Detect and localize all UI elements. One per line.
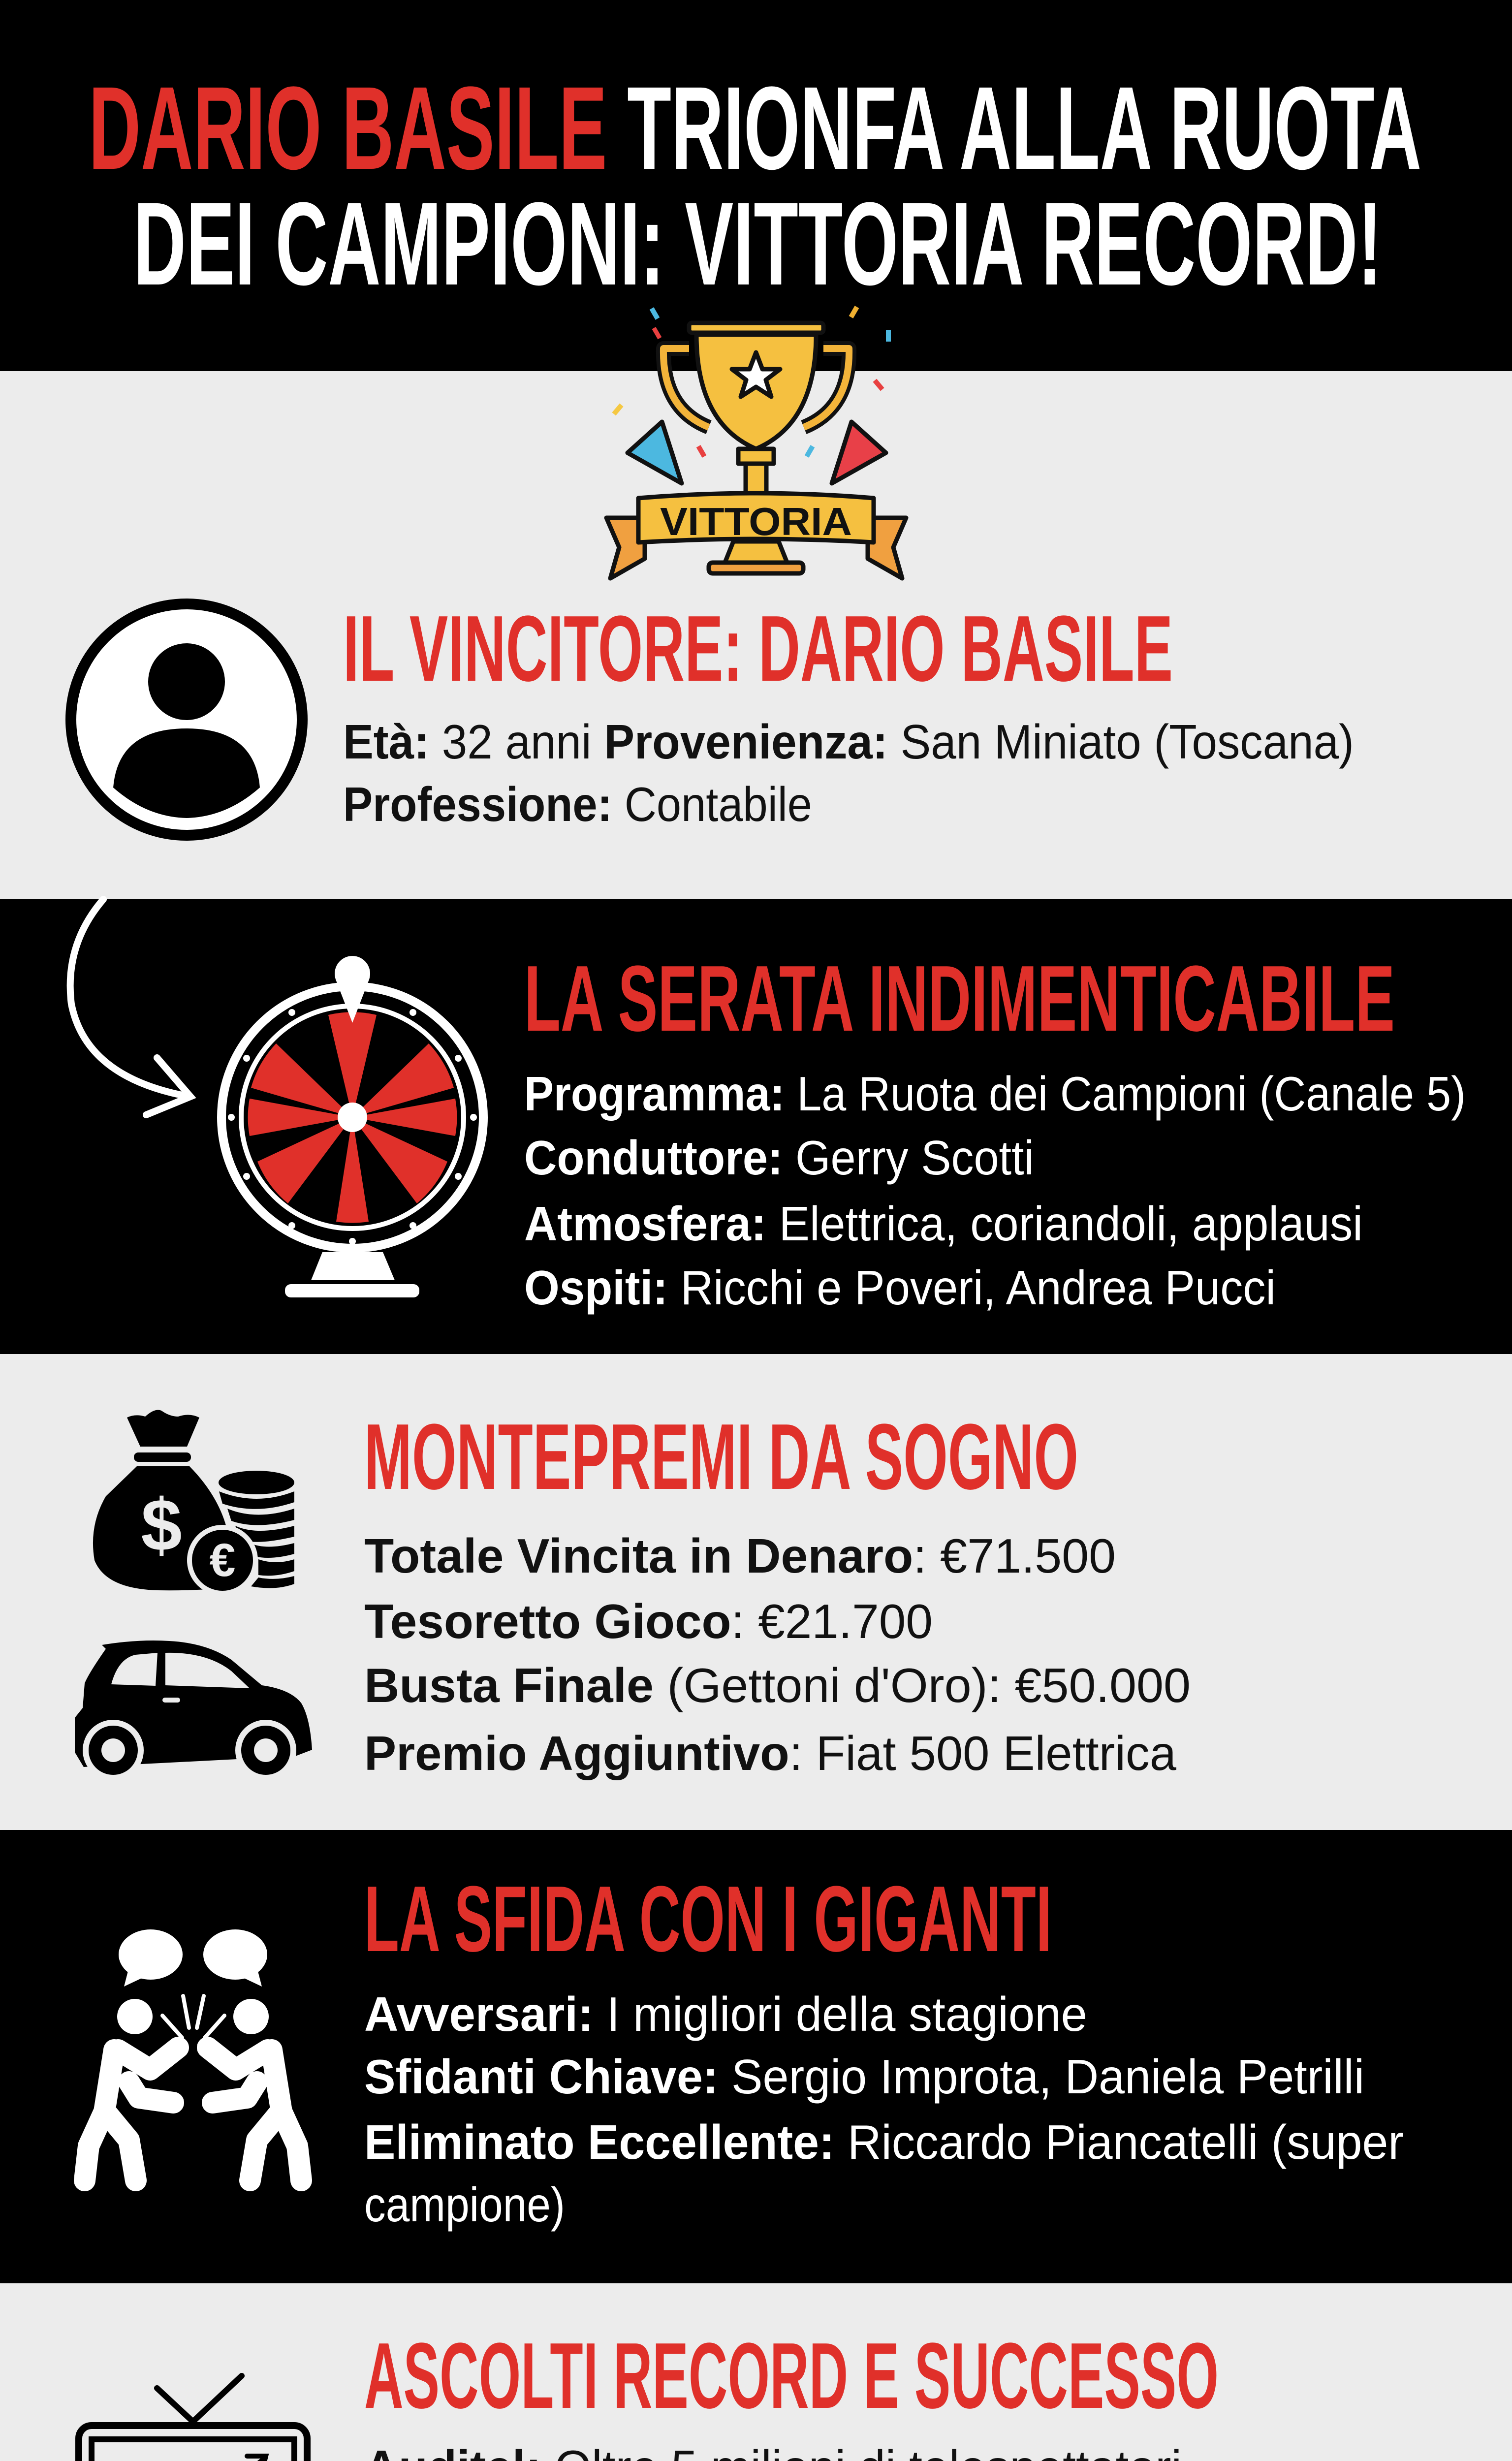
icon: money bag and coins: € [210, 1534, 235, 1586]
text: winner details: Età: 32 anni Provenienza: San Miniato (Toscana) [343, 715, 1354, 769]
text: evening details: Atmosfera: Elettrica, coriandoli, applausi [524, 1197, 1363, 1251]
panel: challenge [85, 1867, 1404, 2232]
heading: challenge: LA SFIDA CON I GIGANTI [364, 1867, 1052, 1971]
text: prize details: Totale Vincita in Denaro: €71.500 [364, 1529, 1116, 1583]
text: challenge details [364, 1987, 1404, 2232]
text: prize details [364, 1529, 1191, 1780]
icon: two people arguing [85, 1929, 301, 2180]
header background [0, 0, 1512, 371]
text: evening details: Conduttore: Gerry Scotti [524, 1131, 1034, 1185]
icon: trophy with VITTORIA banner [606, 306, 906, 578]
text: evening details: Programma: La Ruota dei Campioni (Canale 5) [524, 1067, 1466, 1121]
panel: prize money [75, 1405, 1191, 1780]
icon: trophy with VITTORIA banner: VITTORIA [660, 500, 852, 543]
text: challenge details: Sfidanti Chiave: Sergio Improta, Daniela Petrilli [364, 2050, 1364, 2104]
title [89, 62, 1421, 310]
text: winner details: Professione: Contabile [343, 777, 812, 831]
icon: money bag and coins: $ [141, 1483, 182, 1566]
text: evening details [524, 1067, 1466, 1315]
text: winner details [343, 715, 1354, 831]
icon: money bag and coins [93, 1410, 294, 1593]
icon: wheel of fortune [221, 956, 483, 1297]
icon: person [71, 604, 302, 835]
text: challenge details: Avversari: I migliori della stagione [364, 1987, 1087, 2041]
text: prize details: Premio Aggiuntivo: Fiat 500 Elettrica [364, 1726, 1176, 1780]
text: evening details: Ospiti: Ricchi e Poveri, Andrea Pucci [524, 1261, 1276, 1315]
panel: ratings [79, 2324, 1448, 2461]
text: challenge details: Eliminato Eccellente: Riccardo Piancatelli (super [364, 2115, 1404, 2169]
panel: evening [70, 899, 1466, 1315]
icon: TV with growth chart [79, 2376, 307, 2461]
text: challenge details: campione) [364, 2177, 565, 2232]
text: prize details: Busta Finale (Gettoni d'Oro): €50.000 [364, 1658, 1191, 1712]
text: prize details: Tesoretto Gioco: €21.700 [364, 1594, 933, 1648]
panel: winner [71, 597, 1354, 835]
arrow [70, 899, 190, 1115]
heading: prize: MONTEPREMI DA SOGNO [364, 1405, 1078, 1509]
icon: car [75, 1641, 312, 1778]
